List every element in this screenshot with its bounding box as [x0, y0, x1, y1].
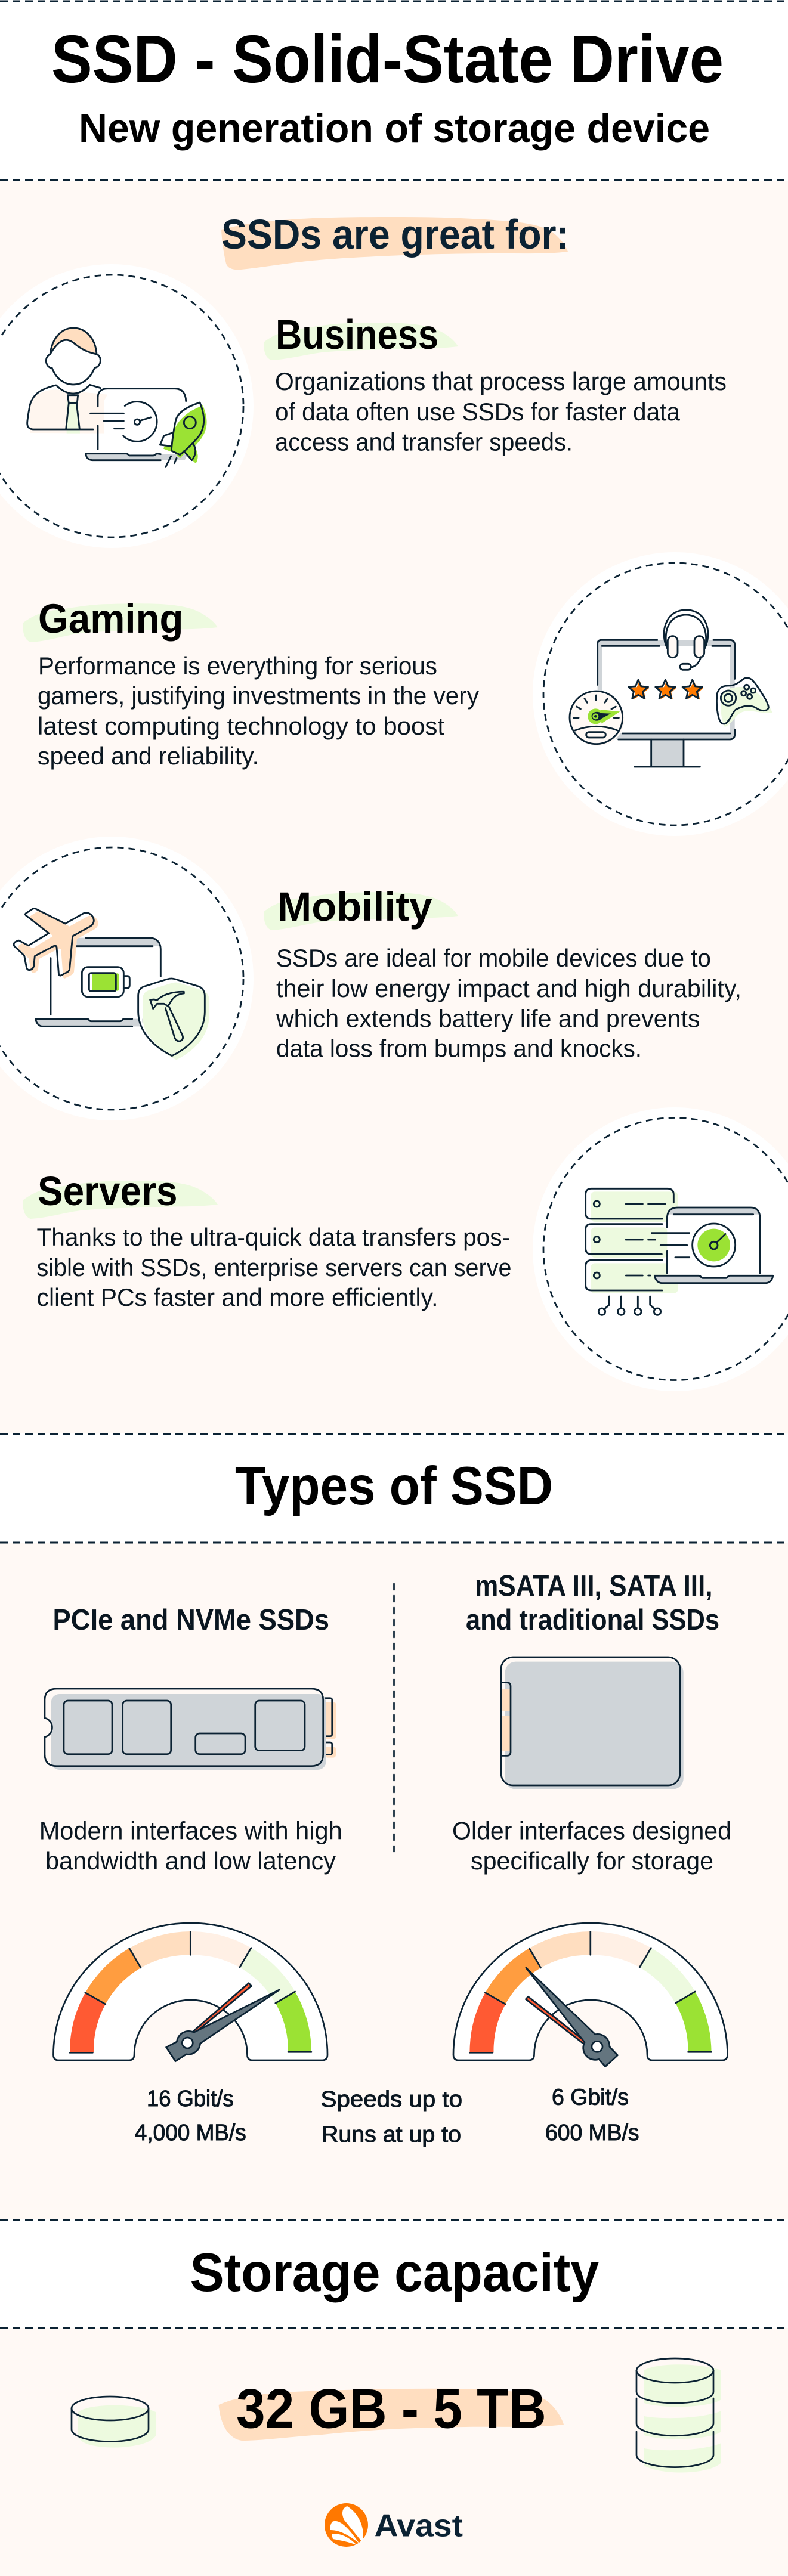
logo: Avast [325, 2503, 463, 2547]
text: PCIe description [39, 1816, 342, 1875]
gauge: SATA speed [453, 1923, 728, 2067]
heading: types of SSD: Types of SSD [235, 1456, 553, 1516]
text: mobility: which extends battery life and prevents [276, 1004, 700, 1033]
speed labels: 16 Gbit/s [147, 2086, 234, 2111]
text: gaming: Performance is everything for serious [38, 652, 437, 680]
text: gaming: gamers, justifying investments in the very [38, 682, 479, 710]
heading: mSATA: and traditional SSDs [466, 1604, 719, 1636]
text: PCIe description: bandwidth and low latency [45, 1847, 336, 1875]
text: business [275, 367, 727, 456]
text: servers [37, 1223, 512, 1311]
heading: mSATA: mSATA III, SATA III, [475, 1570, 713, 1602]
heading: servers: Servers [38, 1168, 178, 1214]
panel: mSATA and traditional SSDs [452, 1570, 731, 1875]
text: gaming: latest computing technology to boost [38, 712, 444, 740]
text: business: access and transfer speeds. [275, 428, 573, 456]
text: mobility: SSDs are ideal for mobile devices due to [276, 944, 711, 972]
icon: business circle [0, 264, 254, 548]
panel: gaming [23, 552, 788, 836]
heading: business: Business [276, 311, 438, 358]
icon: tall storage cylinders [636, 2358, 721, 2472]
icon: mobility circle [0, 837, 254, 1120]
logo: Avast: Avast [375, 2508, 463, 2544]
heading: mobility: Mobility [277, 884, 432, 930]
gauge: PCIe speed [54, 1923, 327, 2061]
panel: servers [23, 1107, 788, 1391]
text: mSATA description: specifically for storage [471, 1847, 713, 1875]
icon: servers circle [533, 1107, 788, 1391]
speed labels: 6 Gbit/s [552, 2085, 629, 2110]
text: mobility: data loss from bumps and knocks. [276, 1034, 642, 1063]
text: servers: sible with SSDs, enterprise servers can serve [37, 1253, 512, 1281]
heading: storage capacity: Storage capacity [190, 2243, 599, 2303]
speed labels: Speeds up to [321, 2087, 462, 2112]
panel: PCIe and NVMe SSDs [39, 1604, 342, 1875]
heading: SSDs are great for: SSDs are great for: [221, 211, 569, 258]
speed labels: 4,000 MB/s [135, 2120, 246, 2145]
speed labels: Runs at up to [322, 2122, 461, 2147]
title: SSD - Solid-State Drive [51, 21, 724, 97]
text: gaming [38, 652, 479, 770]
speed labels: 600 MB/s [545, 2120, 639, 2145]
subtitle: New generation of storage device [79, 106, 710, 151]
heading: mSATA [466, 1570, 719, 1636]
text: mSATA description [452, 1816, 731, 1875]
text: gaming: speed and reliability. [38, 742, 259, 770]
text: PCIe description: Modern interfaces with high [39, 1816, 342, 1845]
text: business: Organizations that process large amounts [275, 367, 727, 395]
icon: M.2 drive [45, 1689, 336, 1770]
text: servers: Thanks to the ultra-quick data transfers pos- [37, 1223, 510, 1251]
heading: gaming: Gaming [38, 596, 184, 642]
text: mobility: their low energy impact and high durability, [276, 974, 741, 1002]
text: business: of data often use SSDs for faster data [275, 398, 681, 426]
text: mobility [276, 944, 741, 1063]
panel: mobility [0, 837, 741, 1120]
text: servers: client PCs faster and more efficiently. [37, 1283, 438, 1311]
icon: small storage cylinder [72, 2397, 156, 2448]
capacity value: 32 GB - 5 TB [236, 2377, 546, 2440]
icon: 2.5-inch SSD [501, 1657, 684, 1789]
panel: business [0, 264, 727, 548]
speed labels [135, 2085, 639, 2147]
icon: gaming circle [533, 552, 788, 836]
heading: PCIe: PCIe and NVMe SSDs [52, 1604, 329, 1636]
text: mSATA description: Older interfaces designed [452, 1816, 731, 1845]
